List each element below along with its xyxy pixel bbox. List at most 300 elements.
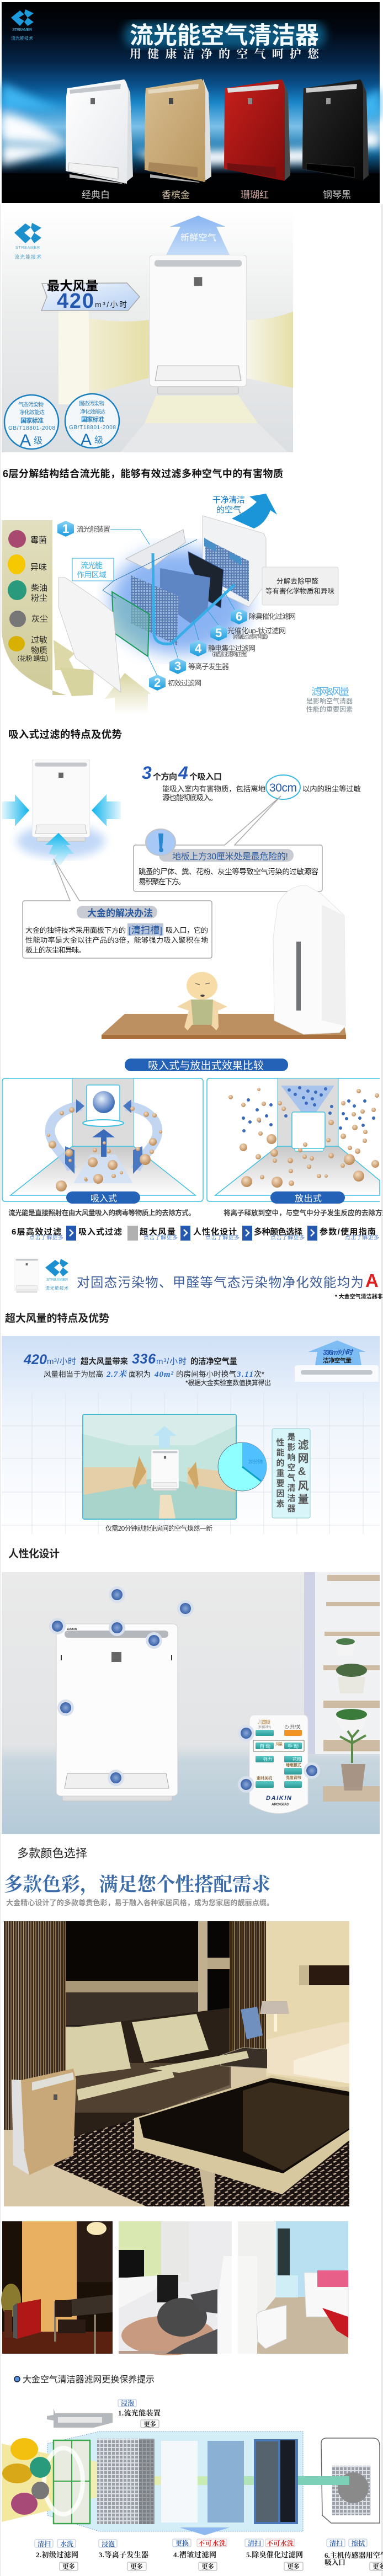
- step 3: 浸泡: [102, 2540, 115, 2548]
- panel: large airflow: [2, 1336, 380, 1534]
- captions: comparison: [8, 1209, 383, 1217]
- panel: pollutants strip: 物质: [31, 646, 47, 655]
- step 5: 光催化up-钛过滤网: [227, 627, 286, 635]
- purifier: side view: [273, 885, 345, 1034]
- heading: 3 directions 4 inlets: 个方向: [153, 772, 177, 782]
- photo: living room: [4, 1921, 349, 2206]
- pipe: [153, 553, 235, 644]
- arrow: clean air: 336m³/小时: [323, 1348, 354, 1356]
- curtains: [4, 1921, 66, 2130]
- panel: suction feature: [2, 760, 361, 1039]
- streamer unit: [126, 530, 185, 570]
- unit outline: [298, 2438, 380, 2523]
- purifier: black: [157, 2275, 178, 2302]
- step 1: 浸泡: [121, 2399, 134, 2407]
- remote: [249, 1715, 308, 1814]
- labels: colours: 经典白: [82, 190, 110, 200]
- logo: streamer: 流光能技术: [14, 254, 41, 260]
- purifier: red: [224, 79, 290, 181]
- pollutants: [2, 2438, 51, 2515]
- arrow: right intake: [92, 794, 121, 826]
- remote: ⏻ 开/关: [285, 1724, 301, 1730]
- streamer device: [47, 2408, 113, 2428]
- step 5: 更多: [287, 2562, 300, 2570]
- text: air exchange: 3.11: [236, 1370, 253, 1379]
- labels: colours: 珊瑚红: [241, 190, 269, 200]
- heading: colour choice: 多款颜色选择: [17, 1847, 87, 1860]
- text: airflow headline: m³/小时: [47, 1357, 76, 1366]
- beam: intake: [2, 2444, 52, 2522]
- filter: catalyst: [254, 2439, 298, 2524]
- captions: comparison: 流光能是直接照射在由大风量吸入的病毒等物质上的去除方式。: [8, 1209, 195, 1217]
- remote: 强力: [263, 1756, 272, 1762]
- airflow zone: [47, 2431, 303, 2531]
- note box: deodorise: [262, 567, 338, 605]
- filter: plasma: [131, 575, 178, 645]
- panel: pollutants strip: [2, 520, 66, 695]
- filter: pleated: [160, 568, 210, 623]
- purifier: [56, 1624, 178, 1801]
- callout: Daikin solution: 大金的解决办法: [87, 907, 153, 918]
- window pillar: [304, 1572, 315, 1754]
- photo: lounge: [119, 2221, 232, 2355]
- badge: gas pollutants: 级: [34, 436, 42, 446]
- callout: Daikin solution: 吸入口，它的: [166, 926, 208, 934]
- callout: Daikin solution: 板上的灰尘和异味。: [25, 946, 86, 954]
- text: air exchange: *根据大金实验室数值换算得出: [185, 1378, 271, 1387]
- pill: suction type: [66, 1191, 140, 1204]
- remote: 花粉: [292, 1756, 301, 1762]
- purifier: red: [13, 2303, 17, 2339]
- nav row: 点击了解更多: [29, 1234, 63, 1241]
- callout: Daikin solution: [23, 859, 212, 958]
- panel: suction type: [2, 1078, 203, 1204]
- step 1: 更多: [143, 2420, 156, 2428]
- icon: mold: [8, 530, 26, 548]
- note: filter and airflow: 是影响空气清器: [306, 697, 353, 705]
- step 1: 流光能装置: [77, 525, 110, 533]
- shelves: [323, 1575, 380, 1802]
- step 3: 3: [174, 659, 181, 673]
- tv: [119, 2250, 144, 2278]
- rug: [54, 2119, 349, 2206]
- panel: hero banner: [2, 2, 380, 203]
- remote: 睡眠模式: [286, 1762, 301, 1767]
- baby: [177, 972, 227, 1030]
- purifier: black: [302, 79, 369, 181]
- remote: ARC458A3: [272, 1803, 289, 1807]
- note box: deodorise: 等有害化学物质和异味: [265, 587, 334, 595]
- nav item: guide: [307, 1226, 379, 1241]
- heading: large airflow: 超大风量的特点及优势: [5, 1312, 109, 1324]
- step 3: 等离子发生器: [188, 662, 229, 671]
- particles: [47, 1107, 162, 1191]
- remote: 风量: [275, 1742, 283, 1746]
- text: airflow headline: 超大风量带来: [81, 1356, 128, 1366]
- comparison pill: [125, 1059, 288, 1072]
- step 5: 5: [215, 626, 222, 640]
- purifier: white: [66, 79, 133, 184]
- text: inlet description: 源也能彻底吸入。: [162, 794, 217, 802]
- logo: streamer: [14, 223, 41, 260]
- step 2: 2: [154, 676, 161, 690]
- purifier: DAIKIN: [67, 1628, 77, 1631]
- pillar: [217, 2256, 232, 2354]
- text: air exchange: 风量相当于为层高: [44, 1370, 103, 1378]
- callout: 30 cm danger: 易积聚在下方。: [139, 878, 185, 886]
- device: [292, 1112, 325, 1151]
- comparison pill: 吸入式与放出式效果比较: [148, 1060, 264, 1072]
- airflow arcs: [44, 2448, 83, 2514]
- arrow: clean air: [308, 1340, 366, 1365]
- banner: purification rating: [14, 1258, 383, 1300]
- logo: streamer: [11, 9, 34, 41]
- arrow: fresh air: 新鲜空气: [180, 233, 216, 243]
- step 2: 水洗: [60, 2540, 73, 2548]
- glow: streamer zone: [110, 549, 248, 654]
- callout: max airflow: m³/小时: [95, 300, 127, 309]
- panel: release type: [207, 1078, 380, 1204]
- step 6: 擦拭: [352, 2539, 365, 2547]
- text: air exchange: 的房间每小时换气: [176, 1370, 236, 1378]
- logo: streamer: 流光能技术: [45, 1285, 68, 1291]
- table: [134, 2075, 349, 2194]
- logo: streamer: 流光能技术: [11, 35, 33, 41]
- nav item: guide: 点击了解更多: [345, 1234, 379, 1241]
- nav item: colours: 点击了解更多: [270, 1234, 305, 1241]
- nav item: design: [180, 1226, 240, 1241]
- text: inlet description: [162, 775, 361, 802]
- step 3: [169, 658, 229, 674]
- feature dots: [49, 1586, 320, 1793]
- callout: 30 cm danger: [134, 796, 322, 891]
- vertical note: [272, 1429, 310, 1518]
- panel: pollutants strip: 异味: [30, 563, 47, 572]
- step 2: 初效过滤网: [168, 679, 201, 687]
- labels: colours: [82, 190, 351, 200]
- bench: [322, 2308, 348, 2338]
- pouf: [157, 2298, 207, 2337]
- label: clean air: 的空气: [216, 505, 241, 515]
- nav row: [12, 1226, 379, 1241]
- heading: suction filter: 吸入式过滤的特点及优势: [8, 729, 122, 740]
- leader lines: [103, 530, 235, 676]
- callout: 30 cm danger: 跳蚤的尸体、粪、花粉、灰尘等导致空气污染的过敏源容: [139, 867, 318, 876]
- arrows: bottom intake: [45, 833, 74, 865]
- text: air exchange: 2.7米: [106, 1370, 127, 1379]
- device: [83, 1085, 124, 1126]
- remote: 自 动: [259, 1743, 270, 1749]
- text: inlet description: 以内的粉尘等过敏: [302, 784, 361, 793]
- callout: max airflow: 最大风量: [47, 279, 98, 293]
- step 5: 不可水洗: [267, 2539, 294, 2547]
- purifier top: [295, 1365, 379, 1382]
- step 4: （褶皱过滤网正面）: [209, 651, 251, 658]
- heading: ergonomic design: 人性化设计: [8, 1548, 60, 1560]
- logo: streamer: STREAMER: [15, 246, 40, 250]
- side table: [220, 2048, 268, 2069]
- light streaks: [2, 83, 380, 165]
- panel: pollutants strip: 柴油: [31, 584, 47, 593]
- picture: [241, 2007, 263, 2039]
- purifier mini: [14, 1258, 39, 1292]
- badge: gas pollutants: A: [20, 431, 31, 450]
- step 6: [325, 2539, 383, 2570]
- room illustration: [83, 1414, 236, 1519]
- rug: [121, 2316, 215, 2355]
- dark base: [66, 2008, 230, 2140]
- logo: streamer: STREAMER: [46, 1278, 68, 1282]
- callout: streamer zone: [72, 558, 114, 581]
- panel: max airflow: [2, 210, 293, 452]
- pill: suction type: 吸入式: [91, 1194, 117, 1204]
- step 3: 更多: [130, 2562, 143, 2570]
- heading: 3 directions 4 inlets: [142, 763, 222, 783]
- remote: 亮度调节: [286, 1775, 301, 1780]
- nav item: airflow: 超大风量: [140, 1227, 175, 1237]
- caption: 20 minutes: 仅需20分钟就能使房间的空气焕然一新: [105, 1524, 212, 1532]
- remote: DAIKIN: [266, 1795, 292, 1802]
- text: airflow headline: 的洁净空气量: [190, 1356, 237, 1366]
- nav item: suction: [66, 1226, 122, 1241]
- step 5: 清扫: [248, 2539, 261, 2547]
- step 2: 更多: [62, 2562, 75, 2570]
- window: [61, 1921, 198, 2027]
- banner: purification rating: A: [365, 1270, 379, 1291]
- filter: green: [112, 592, 149, 656]
- table legs: [199, 2165, 215, 2206]
- nav item: airflow: [127, 1226, 178, 1241]
- step 6: 6: [236, 610, 242, 623]
- purifier: [32, 760, 90, 841]
- text: air exchange: 面积为: [129, 1370, 151, 1378]
- badge: solid pollutants: [65, 394, 119, 449]
- badge: gas pollutants: 气态污染物: [18, 401, 44, 408]
- text: colour description: 大金精心设计了的多款尊贵色彩，易于融入各种家居风格，成为您家居的靓丽点缀。: [6, 1899, 274, 1907]
- photo: nursery: [238, 2221, 348, 2354]
- step 1: 1: [62, 522, 69, 536]
- panel: pollutants strip: 霉菌: [30, 536, 47, 545]
- title: 流光能空气清洁器: [130, 23, 319, 49]
- step 3: [99, 2540, 148, 2570]
- particles: [228, 1088, 379, 1188]
- badge: solid pollutants: 固态污染物: [79, 400, 104, 407]
- note box: deodorise: 分解去除甲醛: [276, 577, 318, 585]
- pill: release type: [270, 1191, 345, 1204]
- icon: odor: [8, 554, 25, 574]
- banner: purification rating: * 大金空气清洁器非: [335, 1293, 383, 1300]
- arrow: clean air: 洁净空气量: [323, 1356, 352, 1364]
- step 3: 3.等离子发生器: [99, 2551, 148, 2559]
- text: inlet description: 能吸入室内有害物质，包括离地: [162, 784, 265, 793]
- step 2: 2.初级过滤网: [36, 2551, 78, 2559]
- remote: 定时关机: [257, 1776, 272, 1781]
- panel: pollutants strip: 过敏: [31, 635, 47, 645]
- badge: gas pollutants: GB/T18801-2008: [8, 425, 55, 431]
- vertical note: 是影响空气清洁器: [286, 1433, 296, 1514]
- purifier: front: [150, 255, 247, 394]
- text: airflow headline: 336: [132, 1351, 156, 1367]
- arrow: fresh air: [166, 216, 230, 255]
- step 5: [245, 2539, 303, 2570]
- pill: release type: 放出式: [295, 1194, 322, 1204]
- title: colour choice: 多款色彩，满足您个性搭配需求: [4, 1874, 270, 1896]
- badge: solid pollutants: 国家标准: [81, 415, 104, 423]
- nav item: suction: 吸入式过滤: [78, 1227, 122, 1237]
- step 1: [57, 521, 110, 537]
- badge: gas pollutants: [4, 395, 58, 450]
- step 6: 除臭催化过滤网: [249, 612, 296, 621]
- heading: six-layer filter: 6层分解结构结合流光能，能够有效过滤多种空气中的有害物质: [3, 468, 283, 479]
- callout: Daikin solution: 性能功率是大金以往产品的3倍，能够强力吸入聚积在地: [25, 936, 208, 944]
- step 1: [118, 2399, 161, 2428]
- step 2: 清扫: [38, 2540, 51, 2548]
- wall: [266, 1921, 349, 2087]
- badge: solid pollutants: A: [81, 431, 92, 449]
- remote: 儿童锁: [258, 1719, 270, 1725]
- note: filter and airflow: 性能的重要因素: [306, 705, 353, 713]
- beam: filtered: [155, 2476, 349, 2485]
- text: airflow headline: [23, 1351, 237, 1367]
- heading: 3 directions 4 inlets: 3: [142, 763, 152, 783]
- text: inlet description: 30cm: [269, 782, 297, 794]
- text: air exchange: [44, 1370, 271, 1387]
- step 2: [35, 2540, 78, 2570]
- badge: gas pollutants: 净化效能达: [19, 409, 45, 416]
- note: filter and airflow: [306, 686, 353, 713]
- callout: streamer zone: 流光能: [81, 561, 103, 570]
- sofa: [190, 2289, 217, 2313]
- arrows: intake: [54, 640, 151, 714]
- yellow columns: [58, 311, 293, 452]
- panel: pollutants strip: （花粉 螨虫）: [13, 654, 52, 662]
- vertical note: 滤网&风量: [296, 1439, 308, 1506]
- back unit: [203, 516, 266, 607]
- arrow: down: [179, 2527, 230, 2535]
- right sofa: [267, 2022, 349, 2083]
- blue ions: [242, 1086, 375, 1132]
- floor: [102, 1014, 346, 1039]
- heading: 3 directions 4 inlets: 4: [178, 763, 188, 783]
- logo: streamer: STREAMER: [12, 28, 32, 32]
- text: airflow headline: 420: [23, 1352, 47, 1367]
- table: [55, 2295, 113, 2317]
- filter: pleated blue: [208, 2441, 244, 2522]
- badge: solid pollutants: 净化效能达: [80, 408, 105, 415]
- step 1: 1.流光能装置: [118, 2409, 161, 2417]
- crib: [304, 2273, 348, 2317]
- arrow: left intake: [2, 794, 29, 826]
- lamp: [260, 2001, 289, 2032]
- icon: diesel dust: [8, 580, 26, 600]
- nav item: colours: [242, 1226, 305, 1241]
- label: clean air: [212, 495, 245, 515]
- badge: solid pollutants: GB/T18801-2008: [69, 425, 116, 431]
- step 6: 吸入口: [325, 2558, 345, 2567]
- step 4: 不可水洗: [198, 2539, 226, 2547]
- labels: colours: 钢琴黑: [323, 190, 351, 200]
- glow under purifier: [17, 825, 105, 858]
- spray: [281, 1086, 334, 1112]
- step 6: 清扫: [329, 2539, 343, 2547]
- step 5: （褶皱过滤网背面）: [229, 633, 272, 640]
- nav item: design: 点击了解更多: [205, 1234, 240, 1241]
- step 4: [190, 640, 256, 658]
- pie chart: 20 minutes: 20分钟: [248, 1458, 263, 1465]
- subtitle: 用健康洁净的空气呵护您: [130, 47, 320, 61]
- panel: filter exploded diagram: [2, 494, 353, 714]
- front panel: [58, 578, 121, 692]
- step 6: [231, 608, 296, 624]
- badge: gas pollutants: 国家标准: [20, 416, 44, 424]
- step 4: [173, 2539, 227, 2570]
- plants: [336, 1638, 367, 1791]
- labels: colours: 香槟金: [162, 190, 190, 200]
- photo: dining room: [1, 2221, 113, 2354]
- step 5: 5.除臭催化过滤网: [246, 2551, 303, 2559]
- nav item: guide: 参数/使用指南: [320, 1227, 376, 1237]
- badge: solid pollutants: 级: [94, 435, 103, 445]
- panel: ergonomic design: [2, 1572, 380, 1834]
- callout: Daikin solution: 大金的独特技术采用面板下方的: [25, 926, 126, 934]
- panel: pollutants strip: 粉尘: [31, 594, 47, 603]
- step 2: [149, 675, 201, 691]
- nav item: colours: 多种颜色选择: [254, 1227, 302, 1237]
- airflow arcs: [50, 1106, 157, 1169]
- text: air exchange: 次*: [254, 1370, 265, 1378]
- icon: allergen: [8, 636, 25, 651]
- vertical note: 性能的重要因素: [275, 1438, 285, 1509]
- nav item: airflow: 点击了解更多: [143, 1234, 178, 1241]
- remote: (长按2秒): [258, 1725, 271, 1729]
- purifier: gold: [12, 2069, 76, 2175]
- note: filter and airflow: 滤网&风量: [311, 686, 349, 697]
- icon: dust: [9, 611, 26, 627]
- filter: pleated white: [161, 2441, 198, 2522]
- text: air exchange: 40m²: [154, 1370, 173, 1379]
- panel: pollutants strip: 灰尘: [31, 614, 48, 624]
- step 4: 4.褶皱过滤网: [173, 2551, 216, 2559]
- title glow: [124, 22, 326, 47]
- centre arrow: [73, 1155, 133, 1183]
- step 4: 4: [195, 642, 202, 655]
- purifier: gold: [145, 79, 211, 183]
- icon: exclamation: [146, 829, 175, 856]
- callout: Daikin solution: [清扫槽]: [129, 925, 162, 936]
- logo: streamer: [45, 1259, 68, 1291]
- nav item: design: 人性化设计: [193, 1227, 237, 1237]
- callout: streamer zone: 作用区域: [77, 570, 107, 579]
- purifier: white: [257, 2305, 286, 2349]
- heading: 3 directions 4 inlets: 个吸入口: [189, 772, 222, 782]
- arrow: clean air: [232, 494, 277, 528]
- step 4: 更换: [175, 2539, 189, 2547]
- banner: purification rating: 对固态污染物、甲醛等气态污染物净化效能均为: [77, 1275, 364, 1290]
- nav row: 6层高效过滤: [12, 1227, 61, 1237]
- callout: 30 cm danger: 地板上方30厘米处是最危险的!: [172, 852, 288, 862]
- step 4: 更多: [201, 2562, 214, 2570]
- step 4: 静电集尘过滤网: [208, 644, 256, 653]
- filter: black: [188, 552, 224, 608]
- bench chairs: [66, 2014, 249, 2101]
- label: clean air: 干净清洁: [212, 495, 245, 505]
- heading: filter care: 大金空气清洁器滤网更换保养提示: [23, 2375, 155, 2385]
- pie chart: 20 minutes: [218, 1442, 267, 1491]
- plant: [1, 2284, 21, 2317]
- callout: max airflow: 420: [57, 290, 94, 313]
- callout: max airflow: [41, 279, 140, 313]
- panel: filter care diagram: [2, 2399, 383, 2570]
